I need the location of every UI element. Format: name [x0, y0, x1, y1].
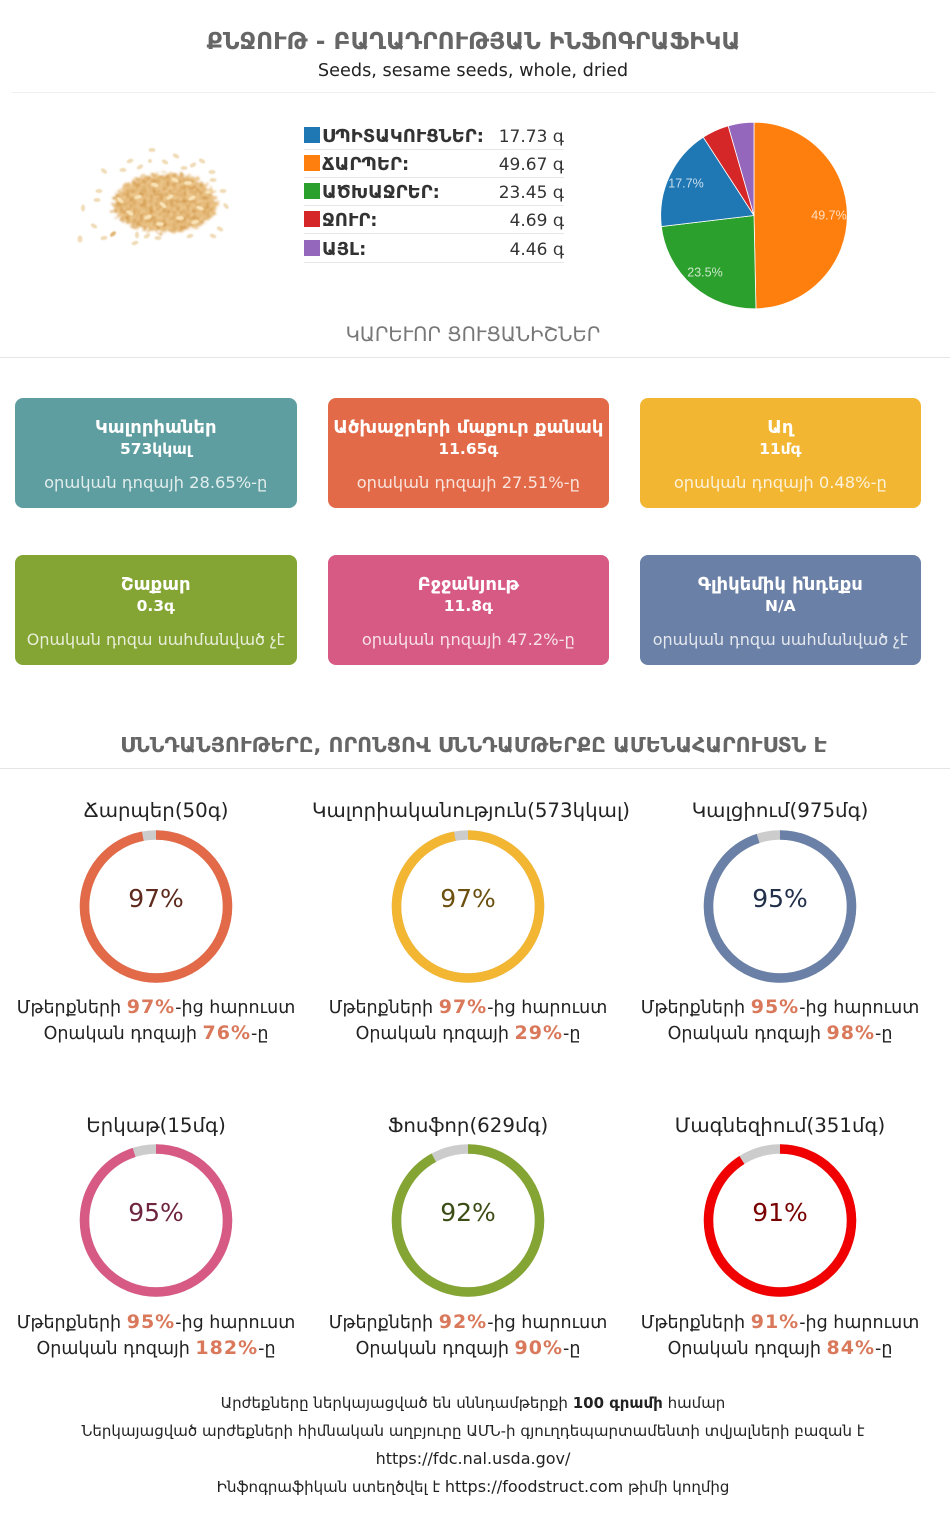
legend row: water: 4.69 գ	[510, 211, 564, 231]
legend row: carbohydrates: 23.45 գ	[499, 183, 564, 203]
card: glycemic index	[640, 555, 921, 665]
subtitle: Seeds, sesame seeds, whole, dried	[318, 61, 628, 81]
stat: calcium: Մթերքների 95%-ից հարուստ	[641, 996, 919, 1018]
legend row: other: 4.46 գ	[510, 240, 564, 260]
stat: fats: Մթերքների 97%-ից հարուստ	[17, 996, 295, 1018]
stat: calories	[312, 799, 630, 1044]
card: sugar: Շաքար	[121, 574, 191, 595]
pie chart: 23.5%	[687, 266, 723, 280]
card: salt: 11մգ	[759, 440, 802, 458]
heading: key indicators: ԿԱՐԵՒՈՐ ՑՈՒՑԱՆԻՇՆԵՐ	[346, 323, 600, 346]
heading: nutrients ranking: ՍՆՆԴԱՆՅՈՒԹԵՐԸ, ՈՐՈՆՑՈՎ ՍՆՆԴԱՄԹԵՐՔԸ ԱՄԵՆԱՀԱՐՈՒՍՏՆ Է	[120, 733, 827, 757]
stat: phosphorus	[329, 1114, 607, 1359]
stat: magnesium: Մագնեզիում(351մգ)	[675, 1114, 885, 1137]
footer notes: https://fdc.nal.usda.gov/	[376, 1449, 570, 1468]
card: salt: օրական դոզայի 0.48%-ը	[674, 473, 887, 492]
legend	[304, 126, 564, 263]
legend row: proteins	[304, 122, 564, 150]
stat: iron: Մթերքների 95%-ից հարուստ	[17, 1311, 295, 1333]
stat: calcium	[641, 799, 919, 1044]
card: salt	[640, 398, 921, 508]
card: fiber: 11.8գ	[444, 597, 493, 615]
card: salt: Աղ	[767, 417, 793, 438]
footer notes	[81, 1394, 865, 1496]
legend row: fats	[304, 150, 564, 178]
legend row: water	[304, 206, 564, 234]
card: fiber: օրական դոզայի 47.2%-ը	[362, 630, 575, 649]
legend row: water: ՋՈՒՐ:	[322, 210, 378, 231]
card: net carbs: 11.65գ	[438, 440, 498, 458]
icon: sesame seed pile	[77, 148, 230, 246]
stat: calcium: Օրական դոզայի 98%-ը	[668, 1022, 892, 1044]
footer notes: Ներկայացված արժեքների հիմնական աղբյուրը ԱՄՆ-ի գյուղդեպարտամենտի տվյալների բազան է	[81, 1422, 865, 1440]
stat: fats: Ճարպեր(50գ)	[84, 799, 228, 822]
title: ՔՆՋՈՒԹ - ԲԱՂԱԴՐՈՒԹՅԱՆ ԻՆՖՈԳՐԱՖԻԿԱ	[207, 28, 740, 55]
card: sugar: Օրական դոզա սահմանված չէ	[27, 630, 285, 649]
stat: calories: Կալորիականություն(573կկալ)	[312, 799, 630, 822]
legend row: carbohydrates	[304, 178, 564, 206]
card: net carbs: օրական դոզայի 27.51%-ը	[357, 473, 580, 492]
card: sugar	[15, 555, 296, 665]
stat: magnesium: 91%	[752, 1198, 808, 1227]
card: calories: Կալորիաներ	[95, 417, 217, 438]
card: glycemic index: N/A	[765, 597, 796, 615]
footer notes: Արժեքները ներկայացված են սննդամթերքի 100 գրամի համար	[221, 1394, 725, 1412]
legend row: other: ԱՅԼ:	[322, 239, 366, 260]
legend row: other	[304, 234, 564, 262]
stat: iron: Օրական դոզայի 182%-ը	[36, 1337, 276, 1359]
card: sugar: 0.3գ	[137, 597, 175, 615]
stat: calories: Օրական դոզայի 29%-ը	[356, 1022, 580, 1044]
stat: iron: 95%	[128, 1198, 184, 1227]
legend row: fats: ՃԱՐՊԵՐ:	[322, 154, 409, 175]
stat: magnesium: Մթերքների 91%-ից հարուստ	[641, 1311, 919, 1333]
card: calories: 573կկալ	[120, 440, 192, 458]
stat: calcium: 95%	[752, 884, 808, 913]
stat: phosphorus: Ֆոսֆոր(629մգ)	[388, 1114, 548, 1137]
pie chart: 49.7%	[811, 208, 847, 222]
legend row: proteins: 17.73 գ	[499, 127, 564, 147]
card: calories: օրական դոզայի 28.65%-ը	[44, 473, 267, 492]
stat: fats: Օրական դոզայի 76%-ը	[44, 1022, 268, 1044]
stat: calcium: Կալցիում(975մգ)	[692, 799, 868, 822]
legend row: fats: 49.67 գ	[499, 155, 564, 175]
card: glycemic index: Գլիկեմիկ ինդեքս	[698, 574, 863, 595]
legend row: proteins: ՍՊԻՏԱԿՈՒՑՆԵՐ:	[322, 126, 484, 147]
card: net carbs: Ածխաջրերի մաքուր քանակ	[333, 417, 603, 438]
footer notes: Ինֆոգրաֆիկան ստեղծվել է https://foodstruct.com թիմի կողմից	[217, 1477, 729, 1496]
legend row: carbohydrates: ԱԾԽԱՋՐԵՐ:	[322, 182, 440, 203]
stat: phosphorus: 92%	[440, 1198, 496, 1227]
card: net carbs	[328, 398, 609, 508]
card: calories	[15, 398, 296, 508]
stat: fats: 97%	[128, 884, 184, 913]
stat: magnesium: Օրական դոզայի 84%-ը	[668, 1337, 892, 1359]
stat: magnesium	[641, 1114, 919, 1359]
stat: phosphorus: Մթերքների 92%-ից հարուստ	[329, 1311, 607, 1333]
stat: phosphorus: Օրական դոզայի 90%-ը	[356, 1337, 580, 1359]
card: fiber	[328, 555, 609, 665]
pie chart: 17.7%	[668, 176, 704, 190]
stat: fats	[17, 799, 295, 1044]
stat: calories: Մթերքների 97%-ից հարուստ	[329, 996, 607, 1018]
card: glycemic index: օրական դոզա սահմանված չէ	[653, 630, 908, 649]
stat: iron: Երկաթ(15մգ)	[86, 1114, 226, 1137]
stat: calories: 97%	[440, 884, 496, 913]
card: fiber: Բջջանյութ	[418, 574, 519, 595]
pie chart	[661, 122, 847, 308]
stat: iron	[17, 1114, 295, 1359]
